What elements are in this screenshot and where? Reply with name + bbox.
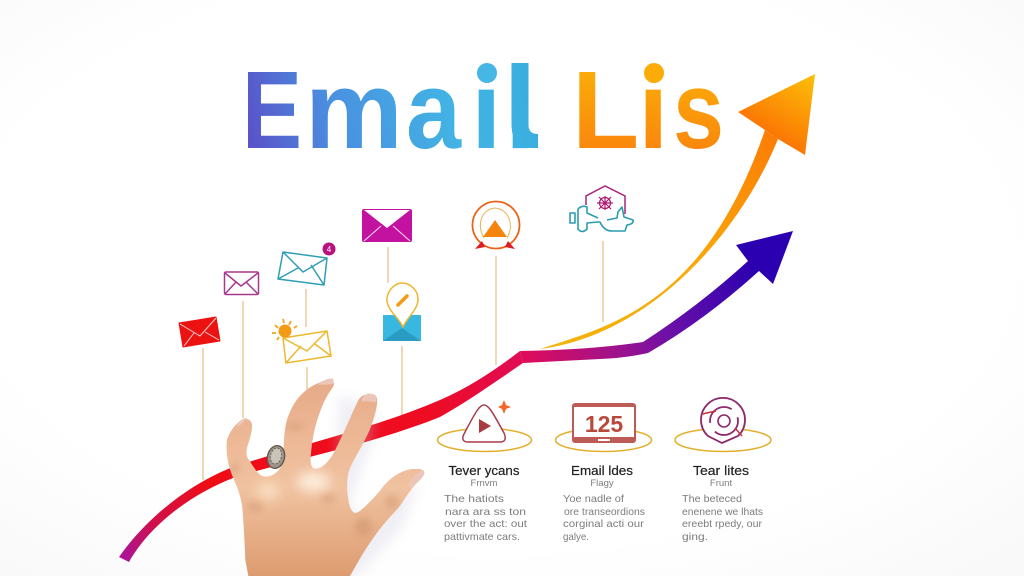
text column 2: Flagy xyxy=(590,478,614,489)
icon group: target on ellipse xyxy=(675,398,771,452)
text column 3 xyxy=(682,464,763,543)
text column 3: The beteced xyxy=(682,493,742,505)
hand xyxy=(226,378,424,576)
title: E xyxy=(242,49,302,172)
icon: blue envelope with pin xyxy=(383,283,421,341)
icon: magenta envelope xyxy=(362,209,412,242)
arrow: purple rising line xyxy=(520,231,793,363)
title: i xyxy=(471,49,502,172)
text column 1: pattivmate cars. xyxy=(444,531,520,543)
text column 3: ereebt rpedy, our xyxy=(682,518,763,530)
fingernails xyxy=(237,378,424,489)
icon: purple envelope xyxy=(224,272,258,294)
text column 2: Email ldes xyxy=(571,464,633,478)
connector lines xyxy=(203,241,603,480)
text column 1: over the act: out xyxy=(444,518,527,530)
text column 1: Frnvm xyxy=(471,478,498,489)
text column 2: galye. xyxy=(563,531,589,543)
icon group: play triangle on ellipse xyxy=(438,400,532,452)
title: L xyxy=(572,49,639,172)
text column 2 xyxy=(563,464,645,543)
icon: teal envelope with badge xyxy=(278,242,336,285)
ring xyxy=(265,444,287,470)
text column 2: ore transeordions xyxy=(564,506,645,518)
title: a xyxy=(406,49,462,172)
icon: red envelope xyxy=(179,317,220,347)
text column 3: enenene we lhats xyxy=(682,506,763,518)
icon group: laptop 125 on ellipse xyxy=(556,403,652,452)
text column 3: Tear lites xyxy=(693,464,749,478)
title: l xyxy=(505,49,536,172)
title xyxy=(242,49,724,172)
text column 3: Frunt xyxy=(710,478,732,489)
icon: yellow envelope with sun xyxy=(272,319,331,363)
arrow: gold rising line xyxy=(540,74,815,349)
icon: hexagon with hand xyxy=(570,186,633,232)
title: s xyxy=(673,49,724,172)
text column 1 xyxy=(444,464,527,543)
text column 3: ging. xyxy=(682,531,708,543)
knuckle shading xyxy=(230,423,399,536)
icon: teal envelope with badge: 4 xyxy=(327,245,332,254)
icon group: laptop 125 on ellipse: 125 xyxy=(585,411,623,437)
text column 1: Tever ycans xyxy=(448,464,520,478)
highlights on back of hand xyxy=(297,472,330,492)
title: m xyxy=(305,49,403,172)
icon: orange circle with triangle xyxy=(472,202,520,249)
text column 2: Yoe nadle of xyxy=(563,493,624,505)
text column 1: nara ara ss ton xyxy=(445,506,526,518)
arrow: red rising line xyxy=(119,351,523,562)
text column 2: corginal acti our xyxy=(563,518,645,530)
text column 1: The hatiots xyxy=(444,493,504,505)
hand shadow on paper xyxy=(330,395,420,576)
title: i xyxy=(638,49,669,172)
